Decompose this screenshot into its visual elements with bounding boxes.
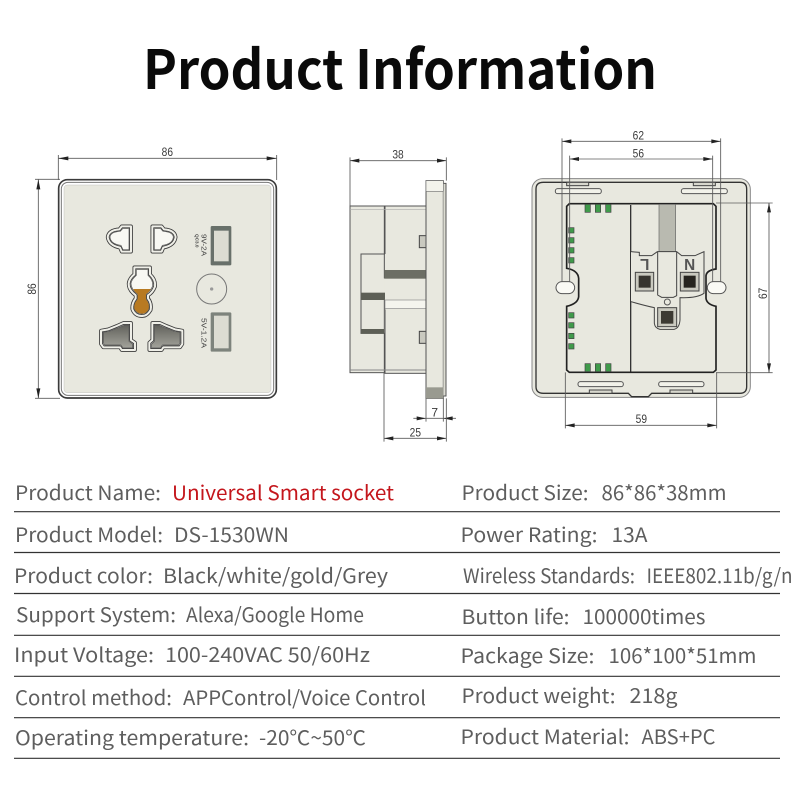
terminal earth bbox=[658, 299, 677, 327]
spec: control method: Control method: bbox=[15, 682, 172, 711]
spec: control method bbox=[15, 682, 426, 711]
dimension: depth 38 bbox=[350, 148, 446, 206]
spec: input voltage bbox=[14, 639, 370, 668]
spec: input voltage: 100-240VAC 50/60Hz bbox=[165, 639, 370, 668]
icon: upper left socket hole bbox=[108, 226, 131, 252]
rear plate bbox=[532, 179, 750, 397]
dimension: 62: 62 bbox=[633, 129, 644, 143]
spec: button life bbox=[462, 601, 706, 630]
panel: rear view of socket bbox=[532, 129, 773, 428]
spec: wireless standards: Wireless Standards: bbox=[463, 560, 635, 589]
mounting slots bbox=[555, 189, 727, 387]
spec: product material bbox=[460, 721, 716, 750]
dimension: 7: 7 bbox=[431, 405, 438, 419]
spec: wireless standards bbox=[463, 560, 792, 589]
spec: button life: Button life: bbox=[462, 601, 570, 630]
title: Product Information bbox=[143, 26, 657, 105]
terminal N bbox=[680, 257, 699, 291]
dimension: 25: 25 bbox=[410, 425, 421, 439]
spec: power rating bbox=[460, 519, 648, 548]
spec: package size: 106*100*51mm bbox=[608, 640, 756, 669]
spec: product name: Product Name: bbox=[15, 477, 161, 506]
spec: product size: Product Size: bbox=[462, 477, 588, 506]
dimension: 56 bbox=[570, 146, 713, 282]
dimension: 67: 67 bbox=[756, 287, 770, 299]
spec: support system: Support System: bbox=[16, 599, 176, 628]
terminal N: N bbox=[684, 257, 695, 274]
terminal L bbox=[635, 255, 654, 291]
upper USB label bbox=[194, 234, 209, 257]
dimension: width 86 bbox=[58, 145, 277, 180]
icon: lower USB port bbox=[211, 312, 231, 352]
table: specification rows bbox=[14, 477, 792, 758]
spec: power rating: Power Rating: bbox=[460, 519, 598, 548]
spec: product color: Product color: bbox=[14, 560, 153, 589]
spec: operating temperature: -20℃~50℃ bbox=[259, 722, 366, 751]
upper USB label: 9V-2A bbox=[200, 234, 209, 257]
spec: product model: Product Model: bbox=[15, 519, 163, 548]
circuit compartment bbox=[629, 205, 633, 372]
rear body bbox=[350, 206, 426, 373]
icon: lower right socket hole bbox=[149, 323, 182, 350]
dimension: depth 38: 38 bbox=[392, 148, 404, 162]
dimension: width 86: 86 bbox=[162, 145, 173, 159]
faceplate edge bbox=[426, 181, 446, 398]
spec: product model: DS-1530WN bbox=[174, 519, 289, 548]
spec: operating temperature bbox=[15, 722, 366, 751]
spec: support system bbox=[16, 599, 364, 628]
edge clips bbox=[567, 182, 715, 393]
spec: product color bbox=[14, 560, 389, 589]
centre channel and terminal block bbox=[631, 204, 704, 329]
icon: upper right socket hole bbox=[152, 226, 176, 252]
panel: side view of socket bbox=[350, 148, 456, 442]
dimension: 56: 56 bbox=[633, 146, 644, 160]
spec: product material: Product Material: bbox=[460, 721, 630, 750]
spec: product weight: 218g bbox=[630, 680, 678, 709]
dimension: 62 bbox=[562, 129, 721, 282]
dimension: height 86 bbox=[25, 179, 60, 398]
green contacts bbox=[569, 204, 611, 372]
dimension: 67 bbox=[716, 203, 773, 373]
spec: input voltage: Input Voltage: bbox=[14, 639, 154, 668]
spec: support system: Alexa/Google Home bbox=[186, 599, 364, 628]
icon: lower left socket hole bbox=[101, 323, 135, 350]
dimension: 59: 59 bbox=[636, 412, 647, 426]
spec: product model bbox=[15, 519, 289, 548]
spec: button life: 100000times bbox=[582, 601, 706, 630]
dimension: 25 bbox=[384, 373, 446, 442]
spec: product weight: Product weight: bbox=[462, 680, 616, 709]
spec: operating temperature: Operating temperature: bbox=[15, 722, 249, 751]
icon: touch button bbox=[197, 274, 227, 304]
lower USB label: 5V-1.2A bbox=[200, 318, 209, 349]
spec: power rating: 13A bbox=[612, 519, 648, 548]
spec: product name: Universal Smart socket bbox=[172, 477, 394, 506]
rear housing bbox=[567, 204, 716, 372]
upper USB label: QC3.0 bbox=[194, 234, 199, 248]
spec: product size: 86*86*38mm bbox=[602, 477, 726, 506]
spec: control method: APPControl/Voice Control bbox=[183, 682, 426, 711]
panel: front view of socket bbox=[25, 145, 277, 398]
dimension: height 86: 86 bbox=[25, 283, 39, 295]
spec: product weight bbox=[462, 680, 678, 709]
spec: product color: Black/white/gold/Grey bbox=[163, 560, 389, 589]
faceplate bbox=[59, 180, 276, 398]
spec: package size bbox=[460, 640, 756, 669]
icon: centre socket hole bbox=[129, 267, 155, 316]
icon: upper USB port bbox=[211, 226, 231, 265]
dimension: 59 bbox=[565, 372, 717, 428]
spec: product material: ABS+PC bbox=[642, 721, 716, 750]
dimension: 7 bbox=[413, 398, 456, 422]
spec: wireless standards: IEEE802.11b/g/n bbox=[646, 560, 792, 589]
spec: product size bbox=[462, 477, 726, 506]
spec: package size: Package Size: bbox=[460, 640, 594, 669]
terminal L: L bbox=[640, 255, 649, 272]
spec: product name bbox=[15, 477, 394, 506]
